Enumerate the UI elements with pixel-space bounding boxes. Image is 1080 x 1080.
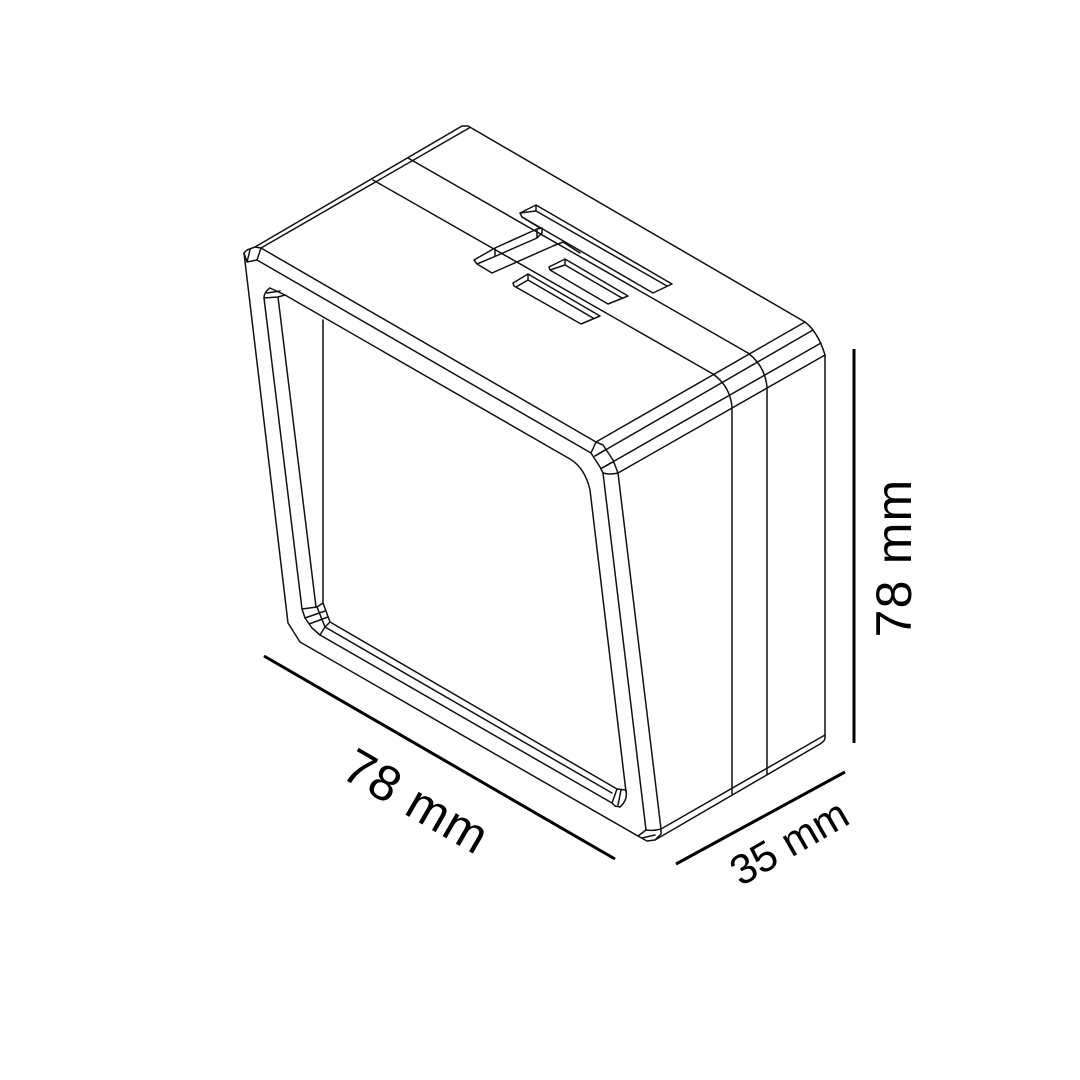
- front frame top edges: [257, 248, 596, 453]
- opening bottom bevel: [320, 622, 617, 806]
- top face outline: [255, 126, 805, 374]
- opening bottom left corner: [302, 603, 330, 635]
- front frame top left corner: [244, 247, 261, 262]
- slot two: [549, 259, 628, 304]
- right face bottom edges: [655, 735, 825, 840]
- opening left inner bevel: [264, 297, 316, 609]
- opening bottom right corner: [612, 789, 626, 807]
- front frame outer left edge and bottom: [244, 253, 638, 836]
- right back corner curve: [805, 322, 825, 735]
- depth label: 35 mm: [722, 790, 856, 895]
- width measure line: [264, 656, 615, 859]
- opening top left corner: [264, 288, 285, 298]
- front frame right bevel: [603, 473, 661, 830]
- dimension: width 78 mm: [264, 656, 615, 865]
- height measure line: [852, 349, 856, 743]
- dimension: depth 35 mm: [676, 772, 856, 895]
- front frame top right corner: [591, 442, 618, 474]
- slot one: [520, 205, 672, 293]
- depth measure line: [676, 772, 845, 864]
- height label: 78 mm: [866, 479, 922, 637]
- width label: 78 mm: [334, 737, 499, 865]
- connector tab: [474, 217, 580, 273]
- isometric line drawing of the box: [244, 126, 825, 841]
- front frame bottom corner: [638, 829, 661, 841]
- right face seam one: [713, 374, 732, 794]
- right face seam two: [748, 353, 767, 774]
- opening top edge: [270, 288, 626, 792]
- back panel vertical edge: [322, 320, 324, 603]
- top right rounded edge bands: [595, 322, 825, 473]
- slot three: [513, 274, 600, 324]
